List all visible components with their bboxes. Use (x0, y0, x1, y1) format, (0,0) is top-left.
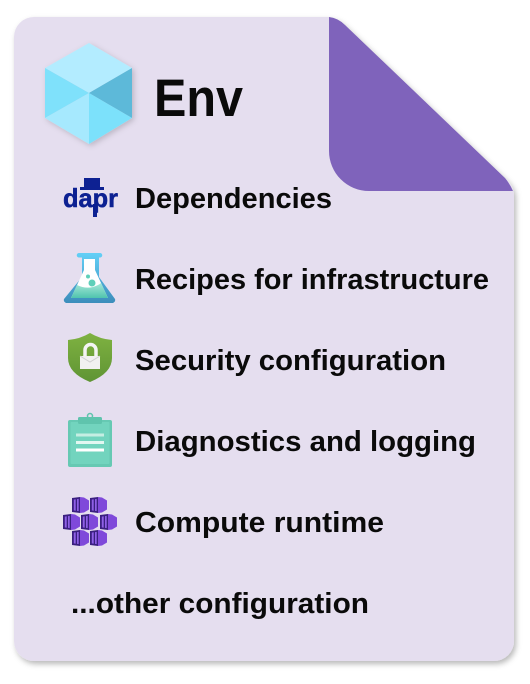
text: other: ...other configuration (71, 588, 369, 620)
text: recipes: Recipes for infrastructure (135, 264, 489, 296)
icon: flask (64, 253, 115, 303)
icon: clipboard (68, 414, 112, 467)
icon: compute cubes (63, 497, 117, 546)
icon: shield (68, 333, 112, 382)
text: security: Security configuration (135, 345, 446, 377)
icon: cube (45, 43, 132, 144)
icon: dapr: dapr (63, 183, 118, 213)
folded corner (329, 17, 513, 191)
title: Env (154, 69, 243, 128)
text: diagnostics: Diagnostics and logging (135, 426, 476, 458)
text: compute: Compute runtime (135, 507, 384, 539)
text: dependencies: Dependencies (135, 183, 332, 215)
